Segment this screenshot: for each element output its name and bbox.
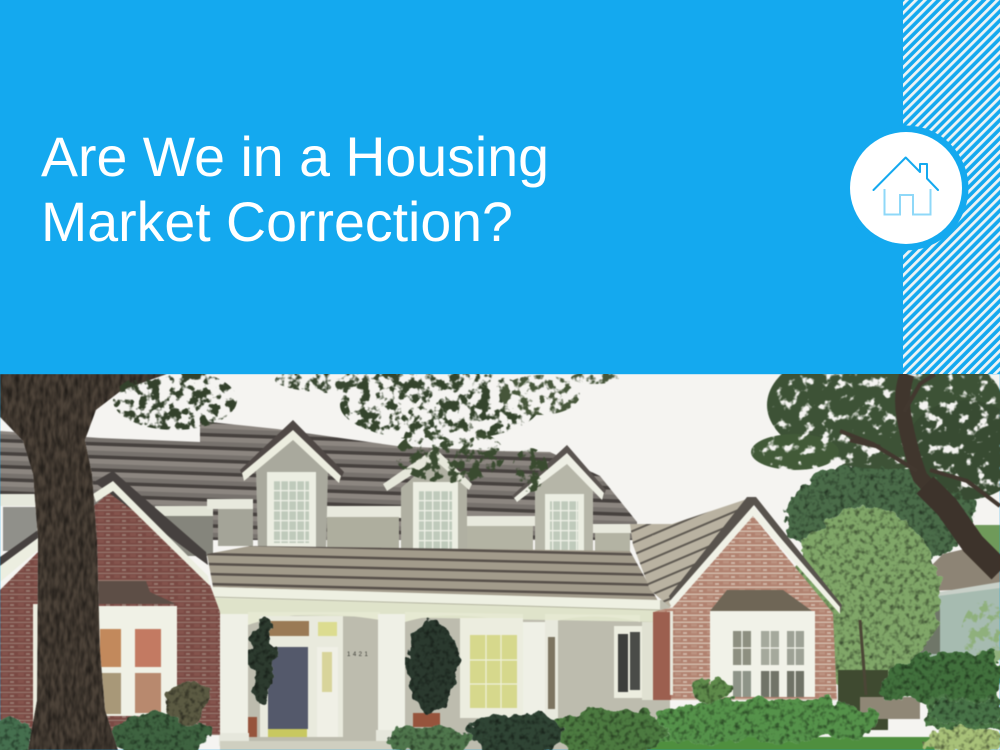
siding and fascia under upper roof [0, 494, 638, 558]
blue header panel [0, 0, 1000, 374]
paving [220, 741, 400, 750]
pine foliage [750, 374, 1000, 500]
photo: house exterior [0, 341, 1000, 750]
right wing brick gable [653, 506, 840, 700]
right porch windows [545, 620, 654, 725]
upper roof [0, 421, 637, 540]
neighbouring house [920, 549, 1000, 660]
porch roof [207, 546, 660, 610]
left bay window [33, 581, 177, 724]
left brick gable [0, 471, 220, 735]
pine branches [840, 374, 1000, 506]
porch topiary and pots [247, 616, 456, 737]
porch wall and entry [213, 596, 670, 750]
right wing roof [630, 497, 842, 612]
title: Market Correction? [41, 191, 513, 253]
porch columns [219, 614, 545, 746]
centre window [460, 618, 523, 718]
diagonal striped band [903, 0, 1000, 374]
hedge and low wall on right [860, 651, 1000, 728]
house number: 1421 [347, 652, 370, 658]
lawn [640, 737, 935, 750]
front door and transom [260, 616, 343, 737]
lower pine trunk [925, 485, 1000, 571]
large oak trunk and branches [0, 374, 167, 750]
title: Are We in a Housing [41, 126, 549, 188]
pine trunk [894, 374, 931, 490]
dormer 1 [240, 420, 344, 551]
background trees on right [785, 463, 1000, 730]
shrubs and garden beds [0, 678, 1000, 750]
oak foliage [113, 366, 619, 492]
dormer 3 [512, 444, 606, 551]
sky [0, 374, 1000, 750]
icon: house in white circle [844, 126, 968, 250]
right bay window [710, 590, 815, 697]
dormer 2 [383, 448, 472, 557]
